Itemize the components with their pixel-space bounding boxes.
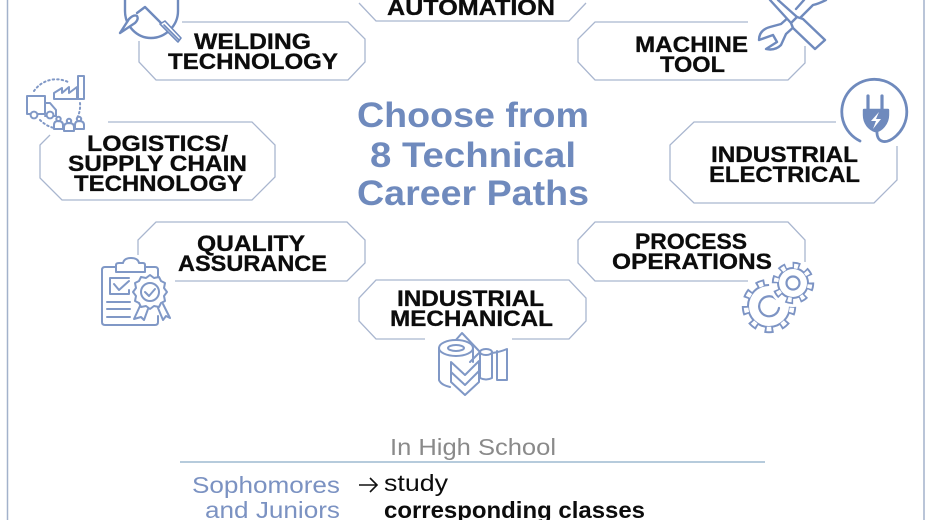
icon: clipboard with badge xyxy=(102,258,170,325)
icon: electric plug xyxy=(842,79,907,142)
panel: automation xyxy=(359,0,586,21)
title: Choose from xyxy=(357,96,589,135)
panel: process operations xyxy=(578,222,805,281)
icon: mechanical parts xyxy=(439,333,507,395)
big gear xyxy=(745,282,793,330)
panel: machine tool: MACHINE xyxy=(635,32,748,57)
panel: process operations: OPERATIONS xyxy=(612,249,772,274)
panel: quality assurance: QUALITY xyxy=(197,231,305,256)
divider line xyxy=(180,461,765,463)
panel: logistics / supply chain technology: LOGISTICS/ xyxy=(87,131,228,156)
icon: logistics truck, factory and people xyxy=(27,76,84,131)
text: study corresponding classes: study xyxy=(384,470,449,496)
icon: gears xyxy=(745,259,817,330)
small gear xyxy=(769,259,817,307)
panel: industrial mechanical: MECHANICAL xyxy=(390,306,553,331)
panel: logistics / supply chain technology: SUPPLY CHAIN xyxy=(68,151,247,176)
panel: industrial mechanical: INDUSTRIAL xyxy=(397,286,544,311)
panel: process operations: PROCESS xyxy=(635,229,747,254)
panel: welding technology: WELDING xyxy=(194,29,311,54)
panel: quality assurance: ASSURANCE xyxy=(178,251,327,276)
panel: quality assurance xyxy=(138,222,365,281)
text: study corresponding classes xyxy=(384,470,645,520)
heading: in high school: In High School xyxy=(390,434,556,460)
panel: industrial electrical xyxy=(670,122,897,203)
panel: industrial electrical: INDUSTRIAL xyxy=(711,142,858,167)
text: sophomores and juniors: Sophomores xyxy=(192,472,340,498)
panel: machine tool xyxy=(578,22,805,80)
panel: machine tool: TOOL xyxy=(660,52,725,77)
panel: industrial mechanical xyxy=(359,280,586,339)
panel: welding technology: TECHNOLOGY xyxy=(168,49,338,74)
icon: welding torch xyxy=(120,0,181,42)
icon: wrench and screwdriver xyxy=(759,0,826,50)
title: 8 Technical xyxy=(370,136,576,175)
title xyxy=(357,96,589,213)
title: Career Paths xyxy=(357,174,589,213)
arrow xyxy=(359,478,377,492)
panel: industrial electrical: ELECTRICAL xyxy=(709,162,860,187)
panel: logistics / supply chain technology xyxy=(40,122,275,200)
text: sophomores and juniors xyxy=(192,472,340,520)
panel: logistics / supply chain technology: TECHNOLOGY xyxy=(74,171,243,196)
panel: welding technology xyxy=(139,22,365,80)
